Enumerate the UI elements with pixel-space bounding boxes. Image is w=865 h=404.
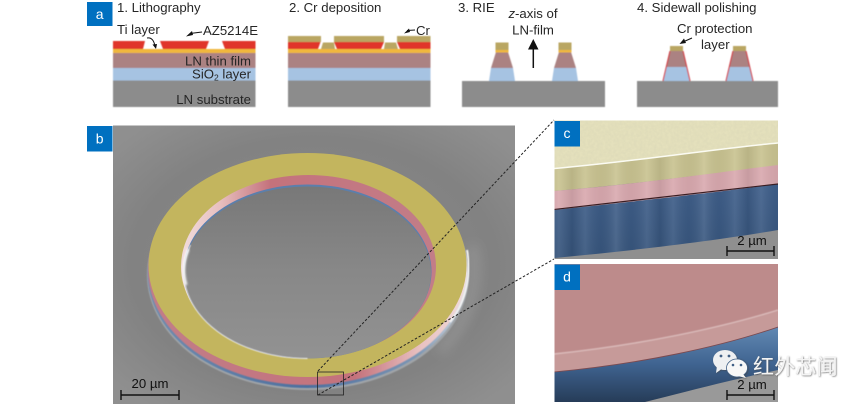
heading: step 3: 3. RIE (458, 0, 495, 15)
ring (147, 153, 475, 390)
SEM closeup layers (554, 120, 778, 259)
inset rectangle (318, 372, 344, 395)
step 2: Cr deposition (288, 0, 431, 107)
label b: b (96, 130, 104, 146)
label a: a (96, 6, 104, 22)
outer wall: pink layer (148, 250, 468, 386)
panel d: SEM closeup (554, 264, 778, 402)
icon: WeChat (713, 350, 748, 378)
watermark text: 红外芯闻 (753, 356, 838, 379)
label d: d (563, 268, 571, 284)
layer stack: step 1 (113, 41, 256, 107)
layer stack: step 4 (637, 46, 778, 107)
heading: step 1: 1. Lithography (117, 0, 201, 15)
hole: floor (184, 186, 431, 358)
SEM closeup layers (554, 264, 778, 402)
ring top surface: Cr (148, 153, 466, 377)
step 4: sidewall polishing (637, 0, 778, 107)
label: SiO2 layer: layer (219, 66, 252, 82)
scale bar: 2 um (d) (727, 377, 774, 400)
label a (87, 2, 112, 26)
label: Cr: Cr (416, 23, 431, 38)
label: Cr protection layer: Cr protection (677, 21, 752, 36)
label: LN thin film: LN thin film (185, 54, 251, 68)
arrow: z-axis (528, 39, 538, 68)
scale bar: 20 um: 20 µm (132, 376, 168, 391)
layer stack: step 2 (288, 36, 430, 107)
label d (554, 264, 580, 290)
label: SiO2 layer: 2 (214, 72, 219, 82)
panel a: fabrication process (87, 0, 778, 107)
label: z-axis of LN-film: z-axis of (508, 6, 558, 21)
arrow: Cr protection (680, 38, 692, 44)
hole: blue wall (184, 184, 432, 358)
watermark (713, 350, 838, 379)
outer highlight (450, 250, 469, 322)
arrow: Ti layer (147, 38, 155, 46)
step 3: RIE (458, 0, 605, 107)
label: LN substrate: LN substrate (176, 92, 251, 107)
label: z-axis of LN-film: LN-film (512, 22, 554, 38)
layer stack: step 3 (462, 42, 605, 107)
arrowhead: AZ5214E (186, 31, 193, 36)
label c: c (564, 125, 570, 141)
hole: pink wall (181, 175, 436, 358)
label: SiO2 layer: SiO (192, 66, 214, 82)
scale bar: 2 um (d): 2 µm (737, 377, 767, 392)
dashed leader to panel c (318, 120, 554, 371)
heading: step 4: 4. Sidewall polishing (637, 0, 756, 15)
label c (554, 121, 580, 146)
outer wall: blue layer (147, 256, 468, 388)
label: Ti layer: Ti layer (117, 22, 160, 37)
arrowhead: Ti layer (152, 44, 157, 49)
SEM background (113, 126, 515, 404)
scale bar: 2 um (c): 2 µm (737, 233, 767, 248)
outer wall: gray edge (146, 249, 469, 390)
scale bar: 2 um (c) (727, 233, 774, 256)
panel b: SEM image of ring (87, 120, 554, 404)
label b (87, 126, 112, 152)
panel c: SEM closeup (554, 120, 778, 259)
dashed leader to panel d (318, 259, 554, 395)
label: Cr protection layer: layer (701, 37, 730, 52)
hole: bright lower-left edge (184, 245, 308, 358)
heading: step 2: 2. Cr deposition (289, 0, 381, 15)
arrow: AZ5214E (190, 32, 202, 34)
glow around ring (444, 252, 478, 348)
step 1: lithography (113, 0, 258, 107)
hole: bright spot (184, 250, 188, 284)
label: AZ5214E: AZ5214E (203, 23, 258, 38)
scale bar: 20 um (121, 376, 179, 400)
arrow: Cr (407, 29, 415, 32)
arrowhead: Cr (404, 28, 410, 34)
